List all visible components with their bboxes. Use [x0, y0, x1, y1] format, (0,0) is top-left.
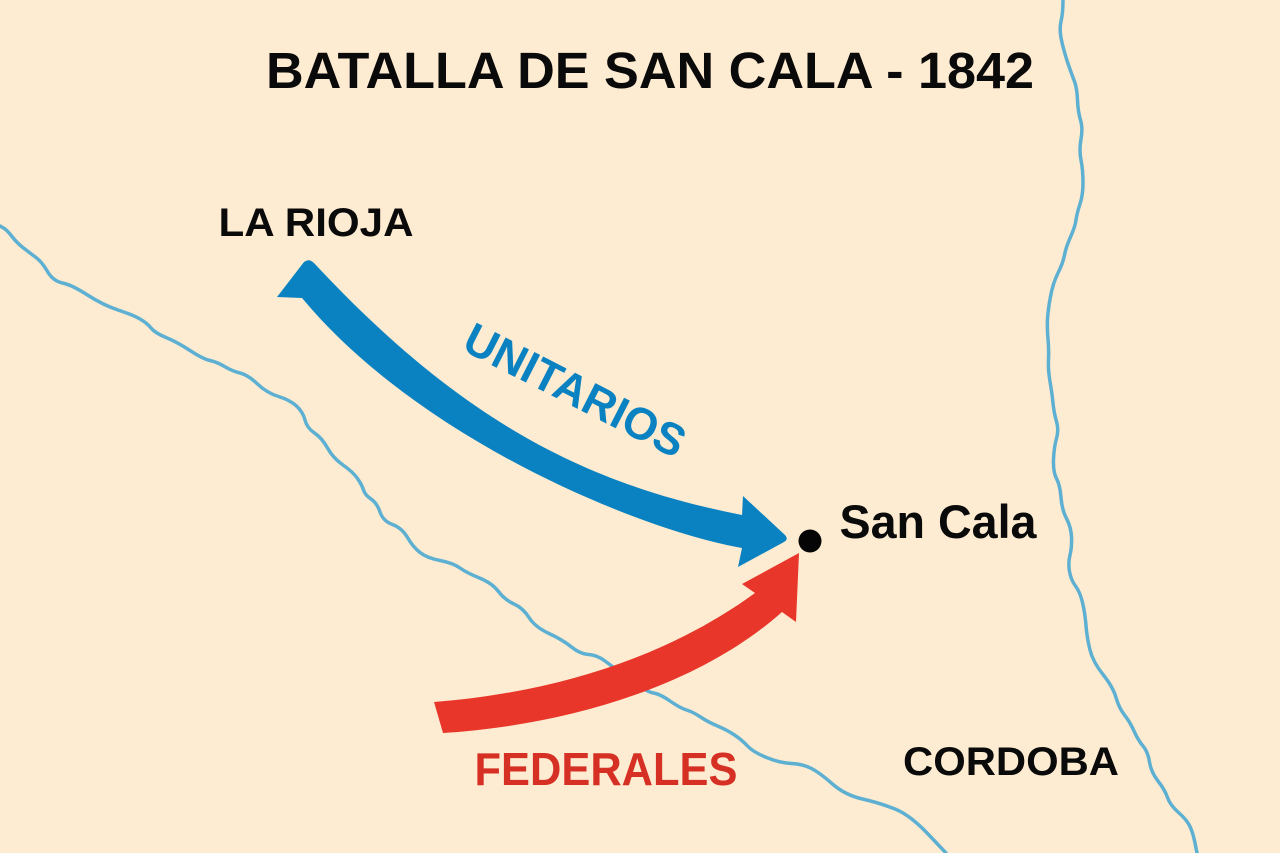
river: west [0, 226, 946, 853]
label: La Rioja: LA RIOJA [218, 201, 414, 245]
label: Unitarios: UNITARIOS [456, 313, 694, 468]
label: San Cala: San Cala [840, 495, 1037, 548]
arrow: Federales [434, 553, 799, 733]
river: east [1047, 0, 1197, 853]
label: Federales: FEDERALES [474, 743, 738, 795]
marker: San Cala [798, 530, 822, 552]
label: Cordoba: CORDOBA [903, 740, 1119, 784]
title: BATALLA DE SAN CALA - 1842 [266, 42, 1034, 99]
arrow: Unitarios [277, 260, 787, 567]
